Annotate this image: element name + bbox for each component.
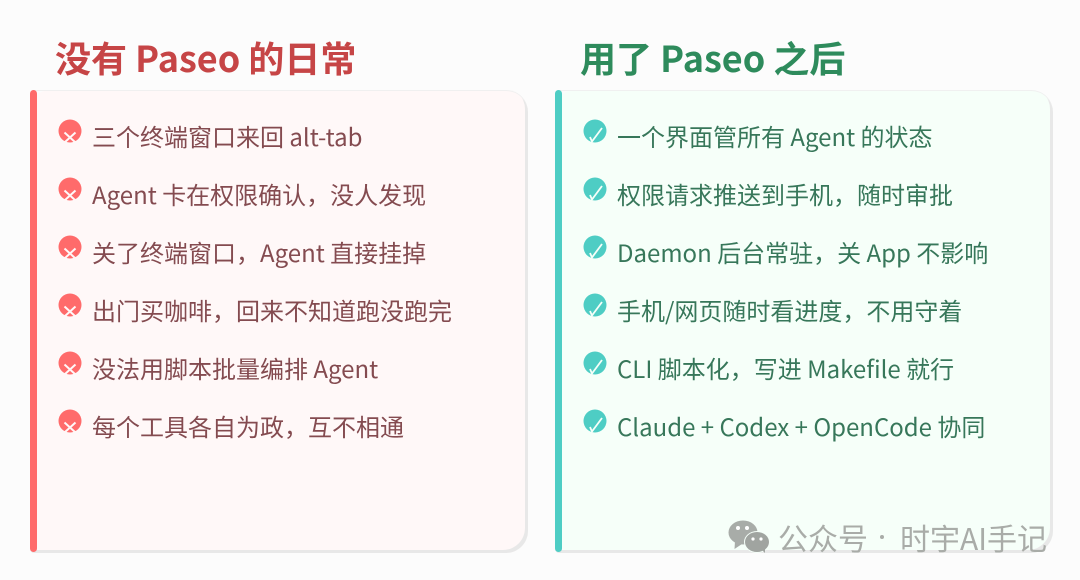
panel: without Paseo	[30, 90, 528, 553]
item: single interface: 一个界面管所有 Agent 的状态	[617, 118, 933, 153]
watermark name: 时宇AI手记	[900, 515, 1047, 559]
watermark	[728, 515, 1047, 559]
item: terminal closed: 关了终端窗口，Agent 直接挂掉	[92, 234, 426, 269]
item: CLI: CLI 脚本化，写进 Makefile 就行	[617, 350, 954, 385]
item: mobile and web: 手机/网页随时看进度，不用守着	[617, 292, 962, 327]
item: coffee: 出门买咖啡，回来不知道跑没跑完	[92, 292, 452, 327]
item: alt-tab: 三个终端窗口来回 alt-tab	[92, 118, 363, 153]
panel: with Paseo	[555, 90, 1053, 553]
watermark text: 公众号	[778, 515, 868, 559]
item: tools isolated: 每个工具各自为政，互不相通	[92, 408, 404, 443]
item: permission stuck: Agent 卡在权限确认，没人发现	[92, 176, 426, 211]
watermark separator	[880, 535, 884, 539]
heading: with Paseo: 用了 Paseo 之后	[580, 31, 845, 83]
icon: wechat	[728, 520, 769, 553]
heading: without Paseo: 没有 Paseo 的日常	[55, 31, 356, 83]
item: agents collaborate: Claude + Codex + OpenCode 协同	[617, 408, 985, 443]
item: daemon: Daemon 后台常驻，关 App 不影响	[617, 234, 988, 269]
item: push to phone: 权限请求推送到手机，随时审批	[617, 176, 953, 211]
item: no scripting: 没法用脚本批量编排 Agent	[92, 350, 378, 385]
